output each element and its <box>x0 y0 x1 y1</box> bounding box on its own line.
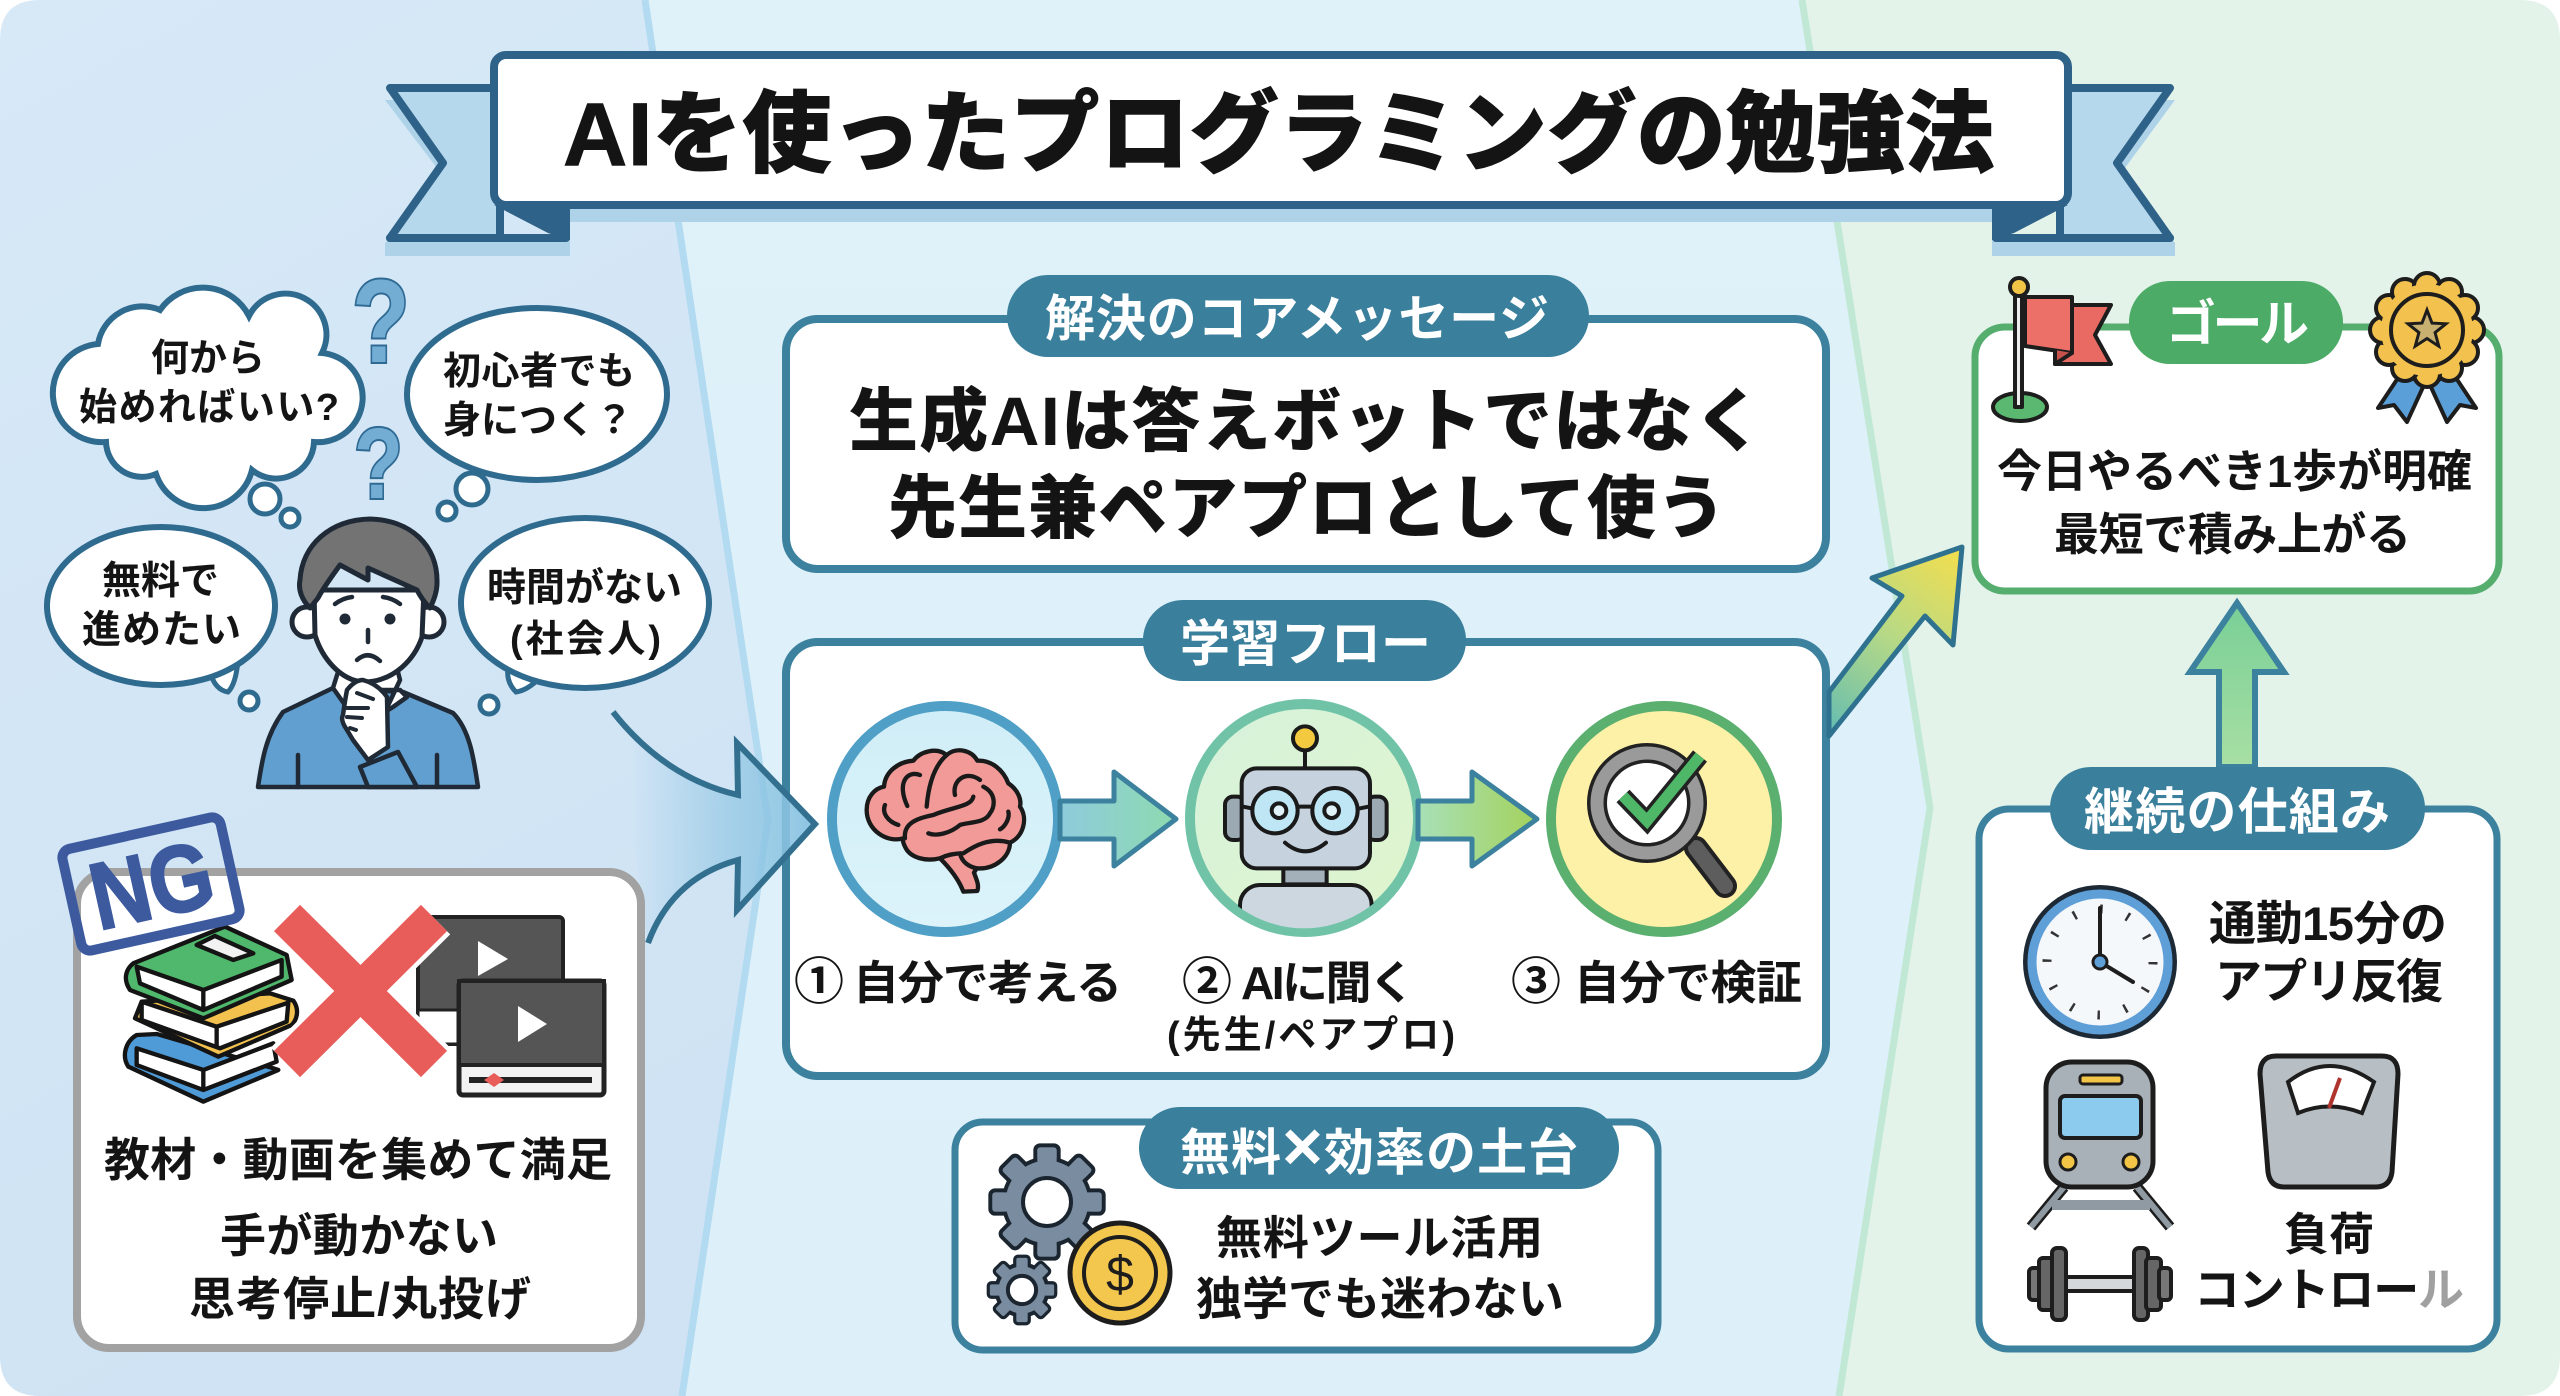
bubble: free: 無料で <box>102 560 219 603</box>
step labels: ① <box>794 954 844 1010</box>
NG text: 手が動かない <box>220 1210 498 1262</box>
diagonal arrow to goal <box>1829 547 1962 736</box>
foundation text: 無料ツール活用 <box>1216 1212 1543 1264</box>
icon: clock <box>2026 888 2174 1036</box>
icon: scale <box>2260 1056 2398 1187</box>
icon: gear large <box>990 1145 1104 1259</box>
banner shadow <box>385 100 2175 256</box>
bubble: no time <box>461 518 709 714</box>
goal text: 最短で積み上がる <box>2054 509 2411 560</box>
heading pill: 継続の仕組み <box>2084 784 2390 840</box>
heading pill <box>1007 275 1589 357</box>
panel: learning flow <box>786 600 1826 1076</box>
core message text <box>849 383 1763 547</box>
icon: video front <box>459 981 604 1095</box>
step 3 circle: verify <box>1551 706 1777 932</box>
step labels: 自分で検証 <box>1574 957 1802 1009</box>
load control text <box>2194 1209 2464 1316</box>
NG text: 教材・動画を集めて満足 <box>104 1134 612 1186</box>
heading pill: 解決のコアメッセージ <box>1045 291 1549 347</box>
NG text: 思考停止/丸投げ <box>189 1273 531 1325</box>
panel: goal <box>1975 273 2499 591</box>
step labels: AIに聞く <box>1241 957 1415 1009</box>
load control text: コントロール <box>2194 1264 2464 1316</box>
commute text <box>2209 897 2447 1008</box>
person thinking <box>258 519 478 787</box>
heading pill: 無料×効率の土台 <box>1180 1107 1578 1185</box>
icon: medal <box>2370 273 2484 422</box>
bubble: beginner <box>407 308 667 520</box>
arrow 2 to 3 <box>1418 772 1537 866</box>
panel: NG habits <box>61 816 641 1348</box>
bubble: where to start: 何から <box>151 338 265 380</box>
question mark 2: ? <box>354 409 403 520</box>
ribbon left <box>390 88 570 240</box>
heading pill: ゴール <box>2166 296 2309 352</box>
step labels: 自分で考える <box>853 957 1122 1009</box>
load control text: 負荷 <box>2284 1209 2374 1260</box>
bubble: free: 進めたい <box>82 609 241 652</box>
icon: video back <box>418 917 563 1044</box>
icon: book stack <box>125 927 297 1102</box>
heading pill: 学習フロー <box>1180 616 1431 672</box>
core message text: 先生兼ペアプロとして使う <box>888 470 1726 547</box>
foundation text <box>1196 1212 1564 1325</box>
bubble: no time: 時間がない <box>487 567 682 610</box>
core message text: 生成AIは答えボットではなく <box>849 383 1763 460</box>
commute text: アプリ反復 <box>2215 955 2443 1008</box>
goal text: 今日やるべき1歩が明確 <box>1997 446 2472 497</box>
NG stamp: NG <box>80 821 223 951</box>
panel: continuity system <box>1979 767 2497 1349</box>
title text: AIを使ったプログラミングの勉強法 <box>563 84 1994 184</box>
goal text <box>1997 446 2472 560</box>
icon: gear small <box>989 1257 1055 1323</box>
bubble: where to start: 始めればいい? <box>79 387 339 429</box>
question mark 1: ? <box>352 255 410 387</box>
heading pill <box>2129 281 2343 364</box>
heading pill <box>1143 600 1466 681</box>
foundation text: 独学でも迷わない <box>1196 1273 1564 1325</box>
icon: flag <box>1993 278 2111 421</box>
step labels: (先生/ペアプロ) <box>1167 1015 1455 1057</box>
title banner <box>385 55 2175 256</box>
step labels: ② <box>1182 954 1232 1010</box>
panel: worried learner <box>47 255 709 787</box>
bubble: where to start <box>53 288 363 527</box>
icon: red cross <box>287 918 434 1064</box>
bubble: beginner: 初心者でも <box>443 351 635 393</box>
icon: coin: $ <box>1106 1246 1134 1302</box>
icon: coin <box>1070 1223 1170 1323</box>
step labels: ③ <box>1511 954 1561 1010</box>
commute text: 通勤15分の <box>2209 897 2447 950</box>
panel: core message <box>786 275 1826 569</box>
icon: dumbbell <box>2029 1248 2171 1320</box>
step 1 circle: brain <box>832 706 1058 932</box>
arrow 1 to 2 <box>1060 772 1176 866</box>
heading pill <box>2050 767 2425 850</box>
icon: train <box>2031 1062 2170 1227</box>
up arrow to goal <box>2190 603 2284 767</box>
NG text <box>104 1134 612 1325</box>
ribbon right <box>1992 88 2170 240</box>
bubble: free <box>47 527 275 710</box>
bubble: no time: (社会人) <box>510 619 661 661</box>
arrow: problems to flow <box>613 712 815 943</box>
panel: foundation <box>955 1107 1658 1350</box>
step labels <box>794 954 1802 1057</box>
bubble: beginner: 身につく？ <box>443 400 633 442</box>
step 2 circle: robot <box>1190 704 1418 952</box>
